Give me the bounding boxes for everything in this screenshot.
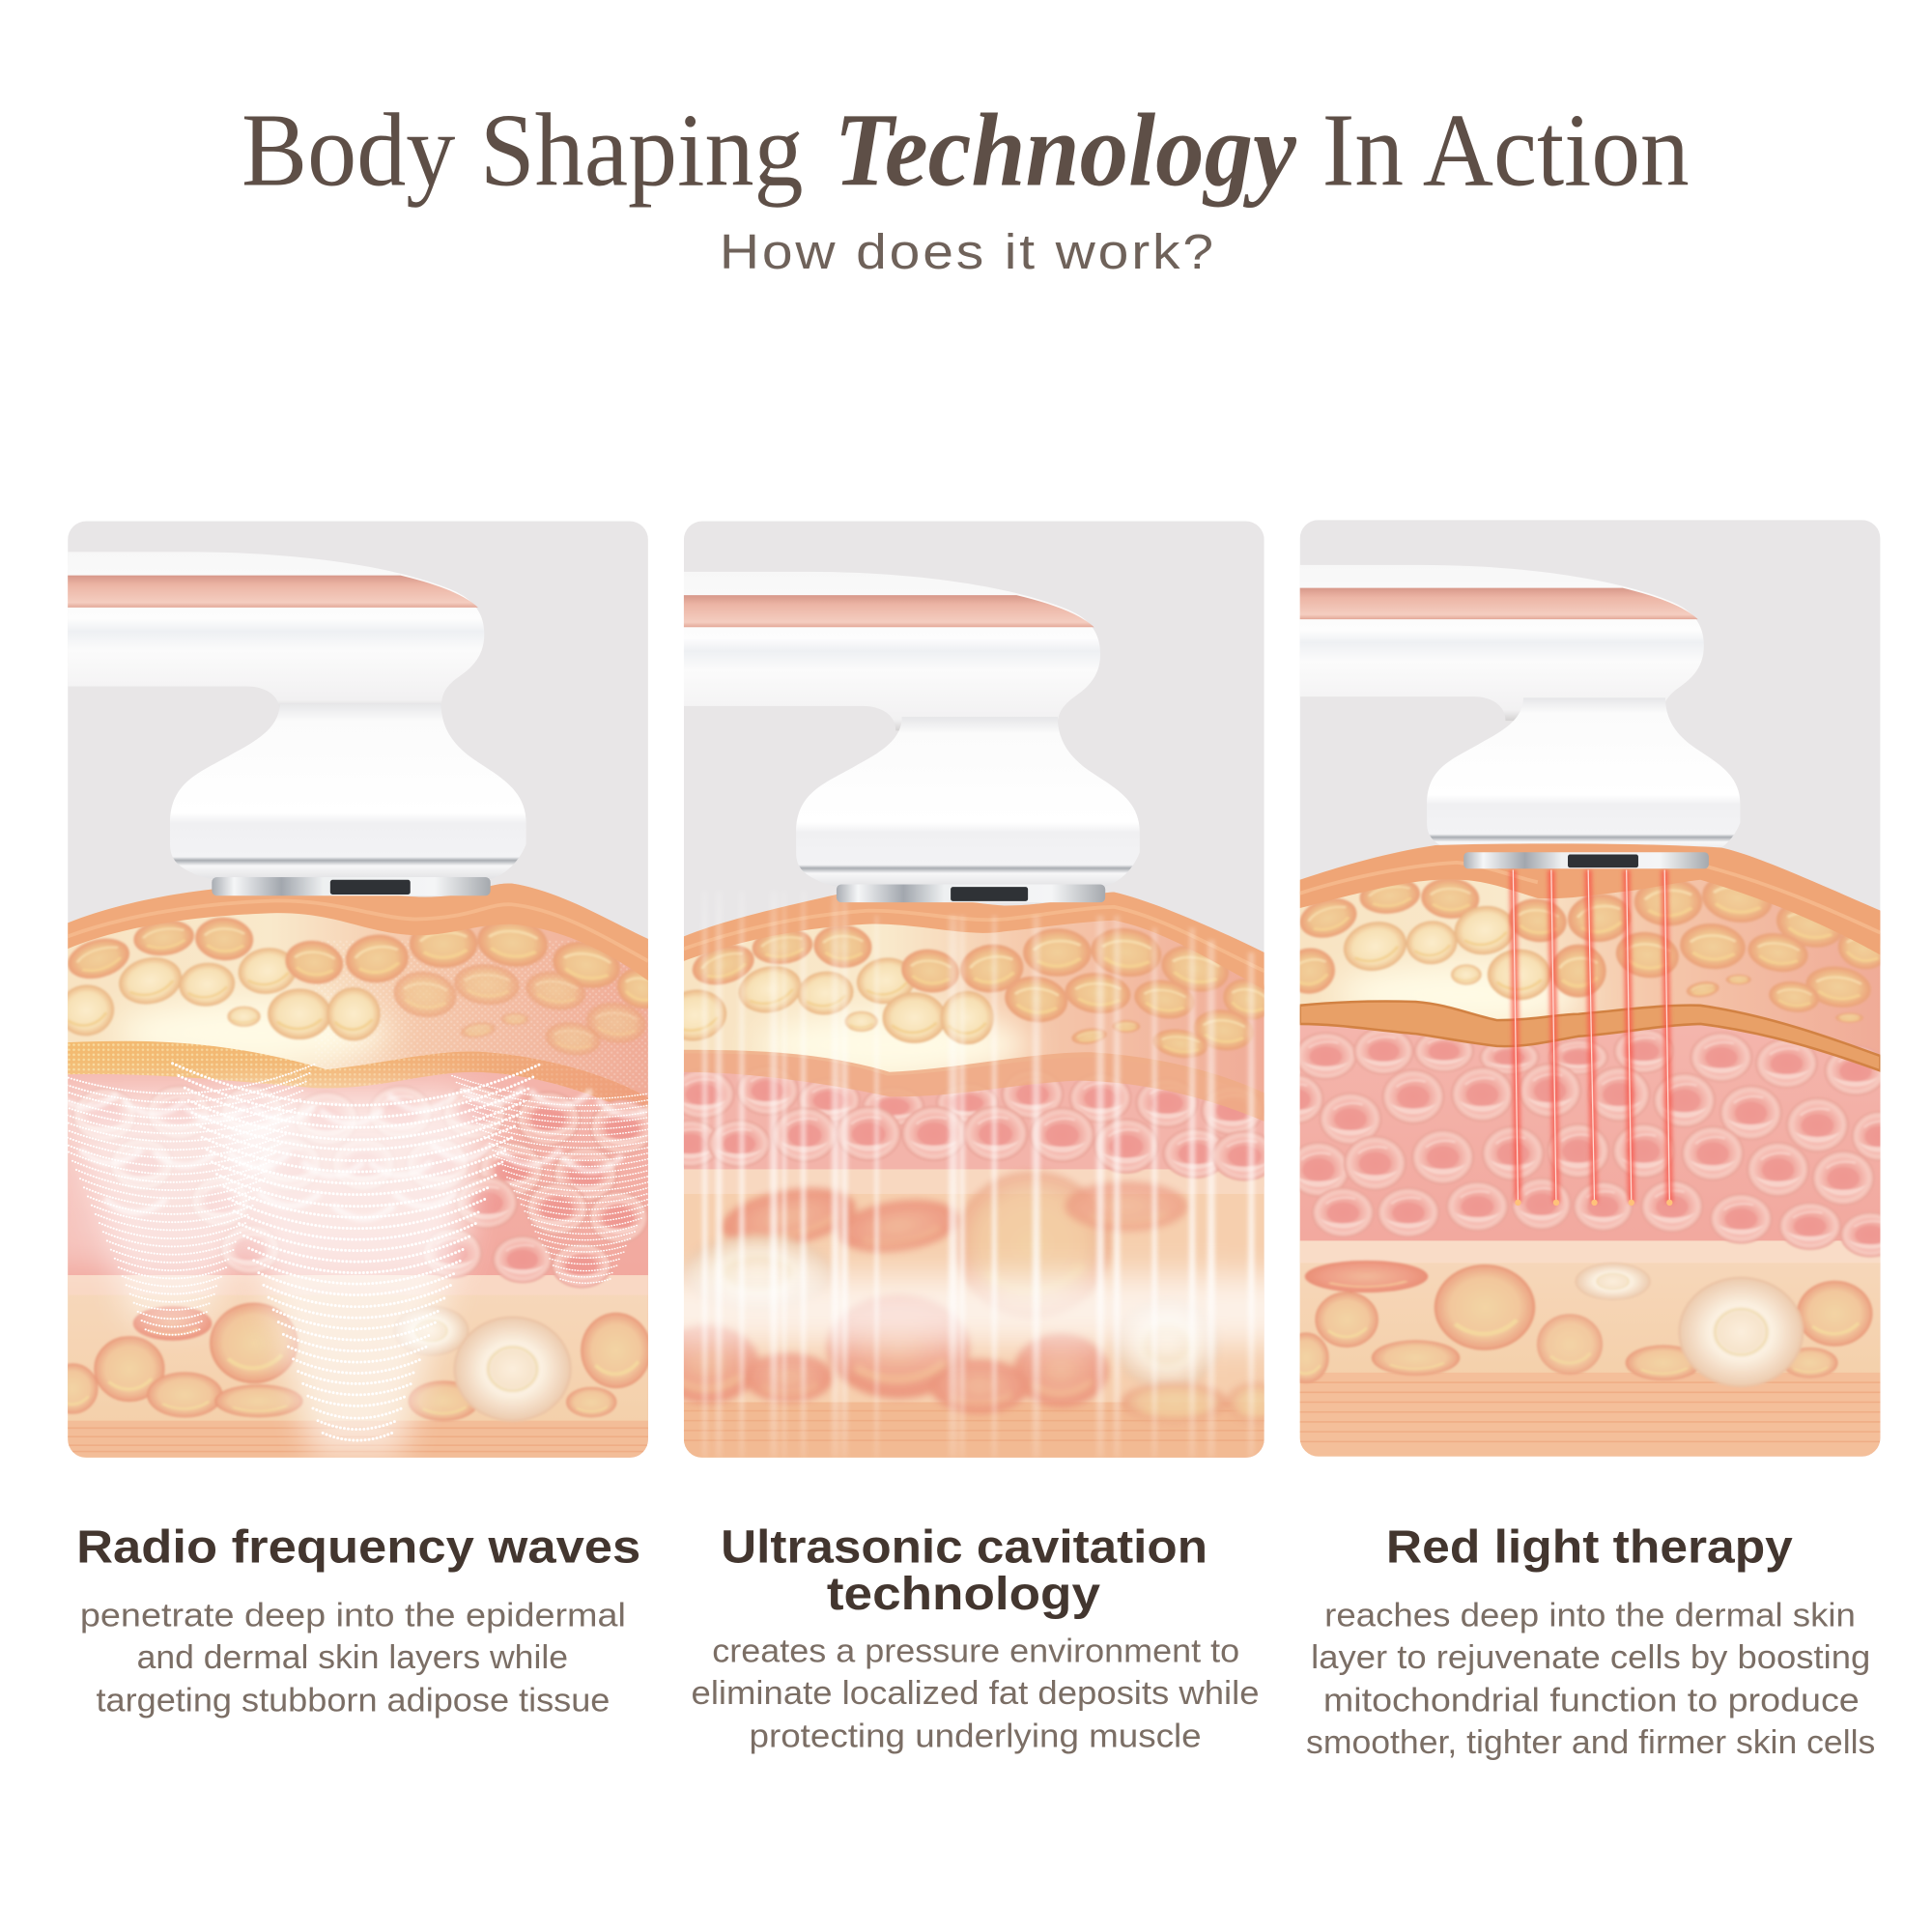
skin cross-section: radio frequency [68,883,648,1458]
title: Body Shaping [242,92,804,208]
title: Technology [835,92,1297,208]
red cells [72,1086,654,1288]
white ultrasonic glow band [635,1275,1312,1345]
dermal band [1300,1002,1880,1070]
body text: red light therapy: mitochondrial function to produce [1323,1683,1860,1719]
translucent dermal band [684,1050,1264,1122]
title [242,92,1690,208]
body text: red light therapy: smoother, tighter and firmer skin cells [1306,1724,1875,1761]
device: handle and head [55,552,526,895]
red light beams [1513,870,1673,1206]
fat cells upper layer [1300,879,1880,1024]
heading: radio frequency waves: Radio frequency waves [76,1520,640,1573]
fat cells upper layer [56,915,670,1059]
body text: radio frequency waves: targeting stubborn adipose tissue [96,1683,610,1719]
heading: ultrasonic cavitation technology: technology [827,1568,1100,1620]
skin cross-section: ultrasonic [656,892,1283,1458]
large lower fat cells [656,1173,1283,1421]
body text: red light therapy: reaches deep into the dermal skin [1324,1598,1856,1634]
top skin band [684,892,1264,989]
radio frequency wave cones [68,1062,648,1458]
body text: radio frequency waves [80,1598,626,1719]
title: In Action [1322,92,1690,208]
heading: red light therapy: Red light therapy [1386,1520,1793,1573]
device base over skin [212,877,491,895]
device: handle and head [671,572,1140,902]
body text: red light therapy [1306,1598,1875,1761]
large lower fat cells [48,1303,650,1421]
body text: radio frequency waves: penetrate deep into the epidermal [80,1598,626,1634]
top skin band [1300,843,1880,955]
panel: red light therapy [1269,520,1906,1458]
body text: ultrasonic cavitation: creates a pressure environment to [712,1634,1239,1670]
skin cross-section: red light [1269,845,1906,1458]
device base over skin [837,885,1105,902]
panel: radio frequency waves [68,522,648,1458]
body text: ultrasonic cavitation: protecting underlying muscle [750,1719,1202,1755]
red cells [1269,1028,1906,1257]
body text: radio frequency waves: and dermal skin layers while [137,1639,568,1676]
body text: red light therapy: layer to rejuvenate cells by boosting [1311,1639,1870,1676]
heading: ultrasonic cavitation technology: Ultrasonic cavitation [721,1520,1208,1573]
top skin band [68,883,648,980]
panel: ultrasonic cavitation [684,522,1264,1458]
subtitle: How does it work? [720,224,1216,279]
device base over skin [1463,852,1709,868]
heading: ultrasonic cavitation technology [721,1520,1208,1620]
dermal band [68,1041,648,1111]
ultrasonic light streaks [702,891,1254,1458]
fat cells upper layer [661,923,1277,1061]
device: handle and head [1288,565,1740,868]
body text: ultrasonic cavitation [692,1634,1260,1755]
body text: ultrasonic cavitation: eliminate localized fat deposits while [692,1675,1260,1712]
large lower fat cells [1284,1261,1872,1386]
red cells [659,1065,1276,1180]
